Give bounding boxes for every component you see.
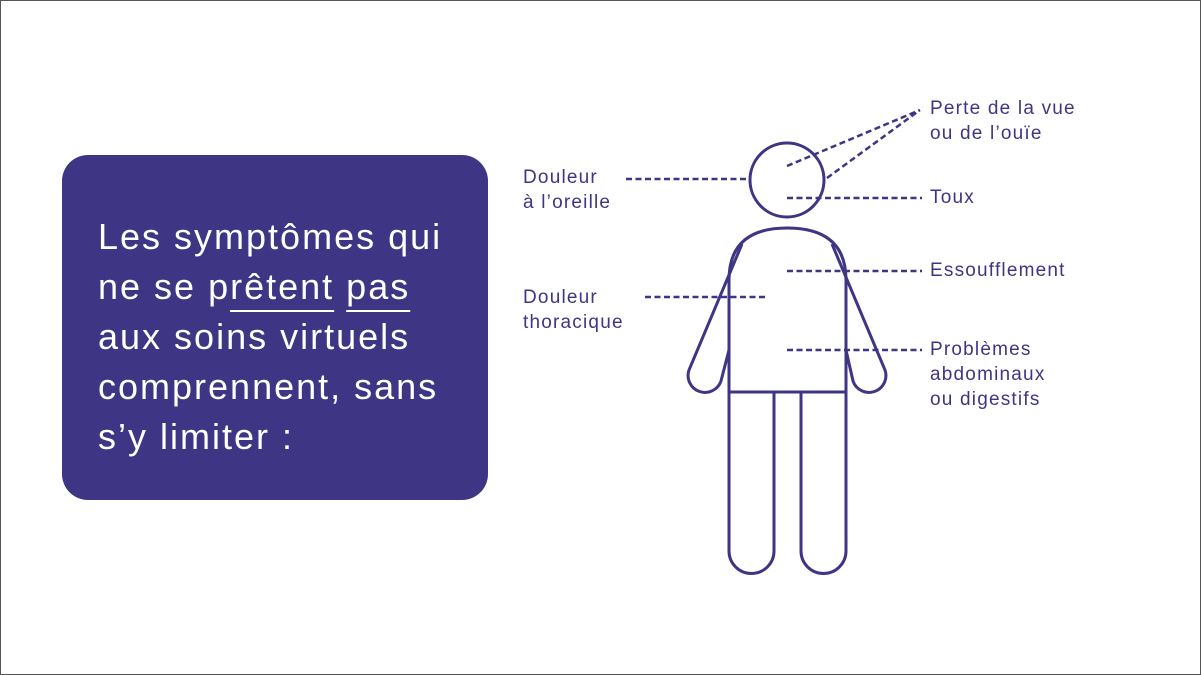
label: abdominal: Problèmes	[930, 339, 1032, 360]
heading text: aux soins virtuels	[98, 316, 410, 357]
label: vision	[930, 98, 1076, 144]
icon: right arm	[832, 244, 886, 392]
label: ear	[523, 167, 611, 213]
dashed line: cough	[787, 197, 922, 199]
heading text: comprennent, sans	[98, 366, 438, 407]
label: breath: Essoufflement	[930, 260, 1066, 281]
label: cough: Toux	[930, 187, 975, 208]
label: chest: Douleur	[523, 287, 598, 308]
icon: left arm	[688, 244, 742, 392]
label: abdominal	[930, 339, 1046, 410]
dashed line: abdominal	[787, 349, 922, 351]
dashed line: vision	[787, 110, 920, 178]
heading text: ne se prêtent pas	[98, 266, 410, 307]
dashed line: breath	[787, 270, 922, 272]
dashed line: chest	[645, 296, 765, 298]
label: chest	[523, 287, 624, 333]
icon: torso	[729, 228, 846, 392]
icon: legs	[729, 392, 846, 574]
panel: heading box	[62, 155, 488, 500]
label: ear: à l’oreille	[523, 192, 611, 213]
label: abdominal: abdominaux	[930, 364, 1046, 385]
heading text: Les symptômes qui	[98, 216, 442, 257]
label: vision: ou de l’ouïe	[930, 123, 1043, 144]
heading text: s’y limiter :	[98, 416, 294, 457]
label: ear: Douleur	[523, 167, 598, 188]
label: chest: thoracique	[523, 312, 624, 333]
label: abdominal: ou digestifs	[930, 389, 1041, 410]
icon: head	[750, 143, 824, 217]
label: vision: Perte de la vue	[930, 98, 1076, 119]
heading text	[98, 216, 442, 457]
dashed line: ear	[626, 178, 749, 180]
